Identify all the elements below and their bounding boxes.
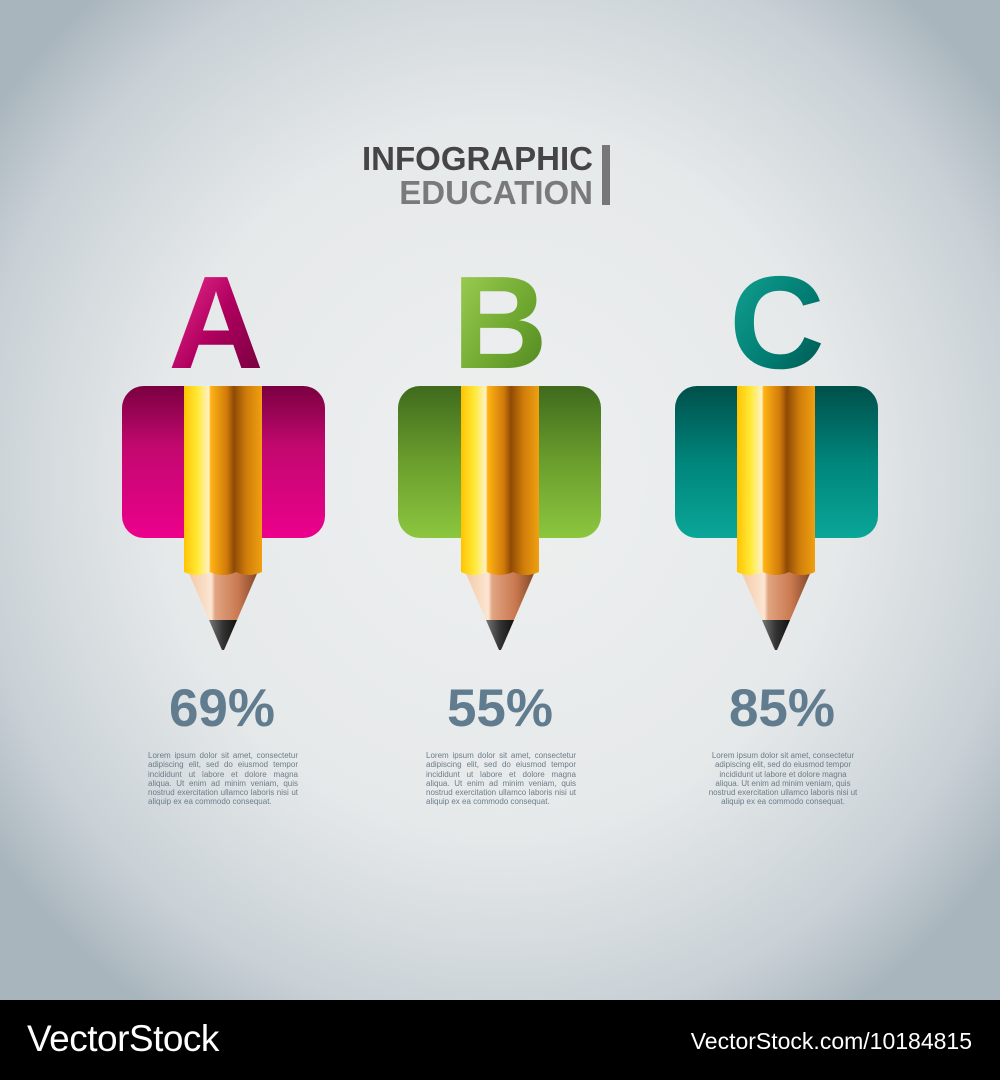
text A: Lorem ipsum dolor sit amet, consectetur adipiscing elit, sed do eiusmod tempor incididunt ut labore et dolore magna aliqua. Ut enim ad minim veniam, quis nostrud exercitation ullamco laboris nisi ut aliquip ex ea commodo consequat. (148, 751, 298, 806)
footer: VectorStock (27, 1018, 219, 1059)
letter B: B (452, 249, 548, 396)
percentage B: 55% (447, 679, 553, 738)
box C (675, 386, 878, 538)
title: INFOGRAPHIC (362, 140, 593, 177)
letter C: C (729, 249, 825, 396)
panel: C (675, 249, 878, 650)
footer (0, 1000, 1000, 1080)
box A (122, 386, 325, 538)
footer: VectorStock.com/10184815 (691, 1028, 972, 1054)
panel: B (398, 249, 601, 650)
panel: A (122, 249, 325, 650)
box B (398, 386, 601, 538)
percentage A: 69% (169, 679, 275, 738)
percentage C: 85% (729, 679, 835, 738)
pencil B (461, 386, 539, 650)
text C: Lorem ipsum dolor sit amet, consectetur adipiscing elit, sed do eiusmod tempor incididunt ut labore et dolore magna aliqua. Ut enim ad minim veniam, quis nostrud exercitation ullamco laboris nisi ut aliquip ex ea commodo consequat. (709, 751, 857, 806)
title: EDUCATION (399, 174, 593, 211)
pencil A (184, 386, 262, 650)
pencil C (737, 386, 815, 650)
title (362, 140, 610, 211)
letter A: A (168, 249, 264, 396)
text B: Lorem ipsum dolor sit amet, consectetur adipiscing elit, sed do eiusmod tempor incididunt ut labore et dolore magna aliqua. Ut enim ad minim veniam, quis nostrud exercitation ullamco laboris nisi ut aliquip ex ea commodo consequat. (426, 751, 576, 806)
